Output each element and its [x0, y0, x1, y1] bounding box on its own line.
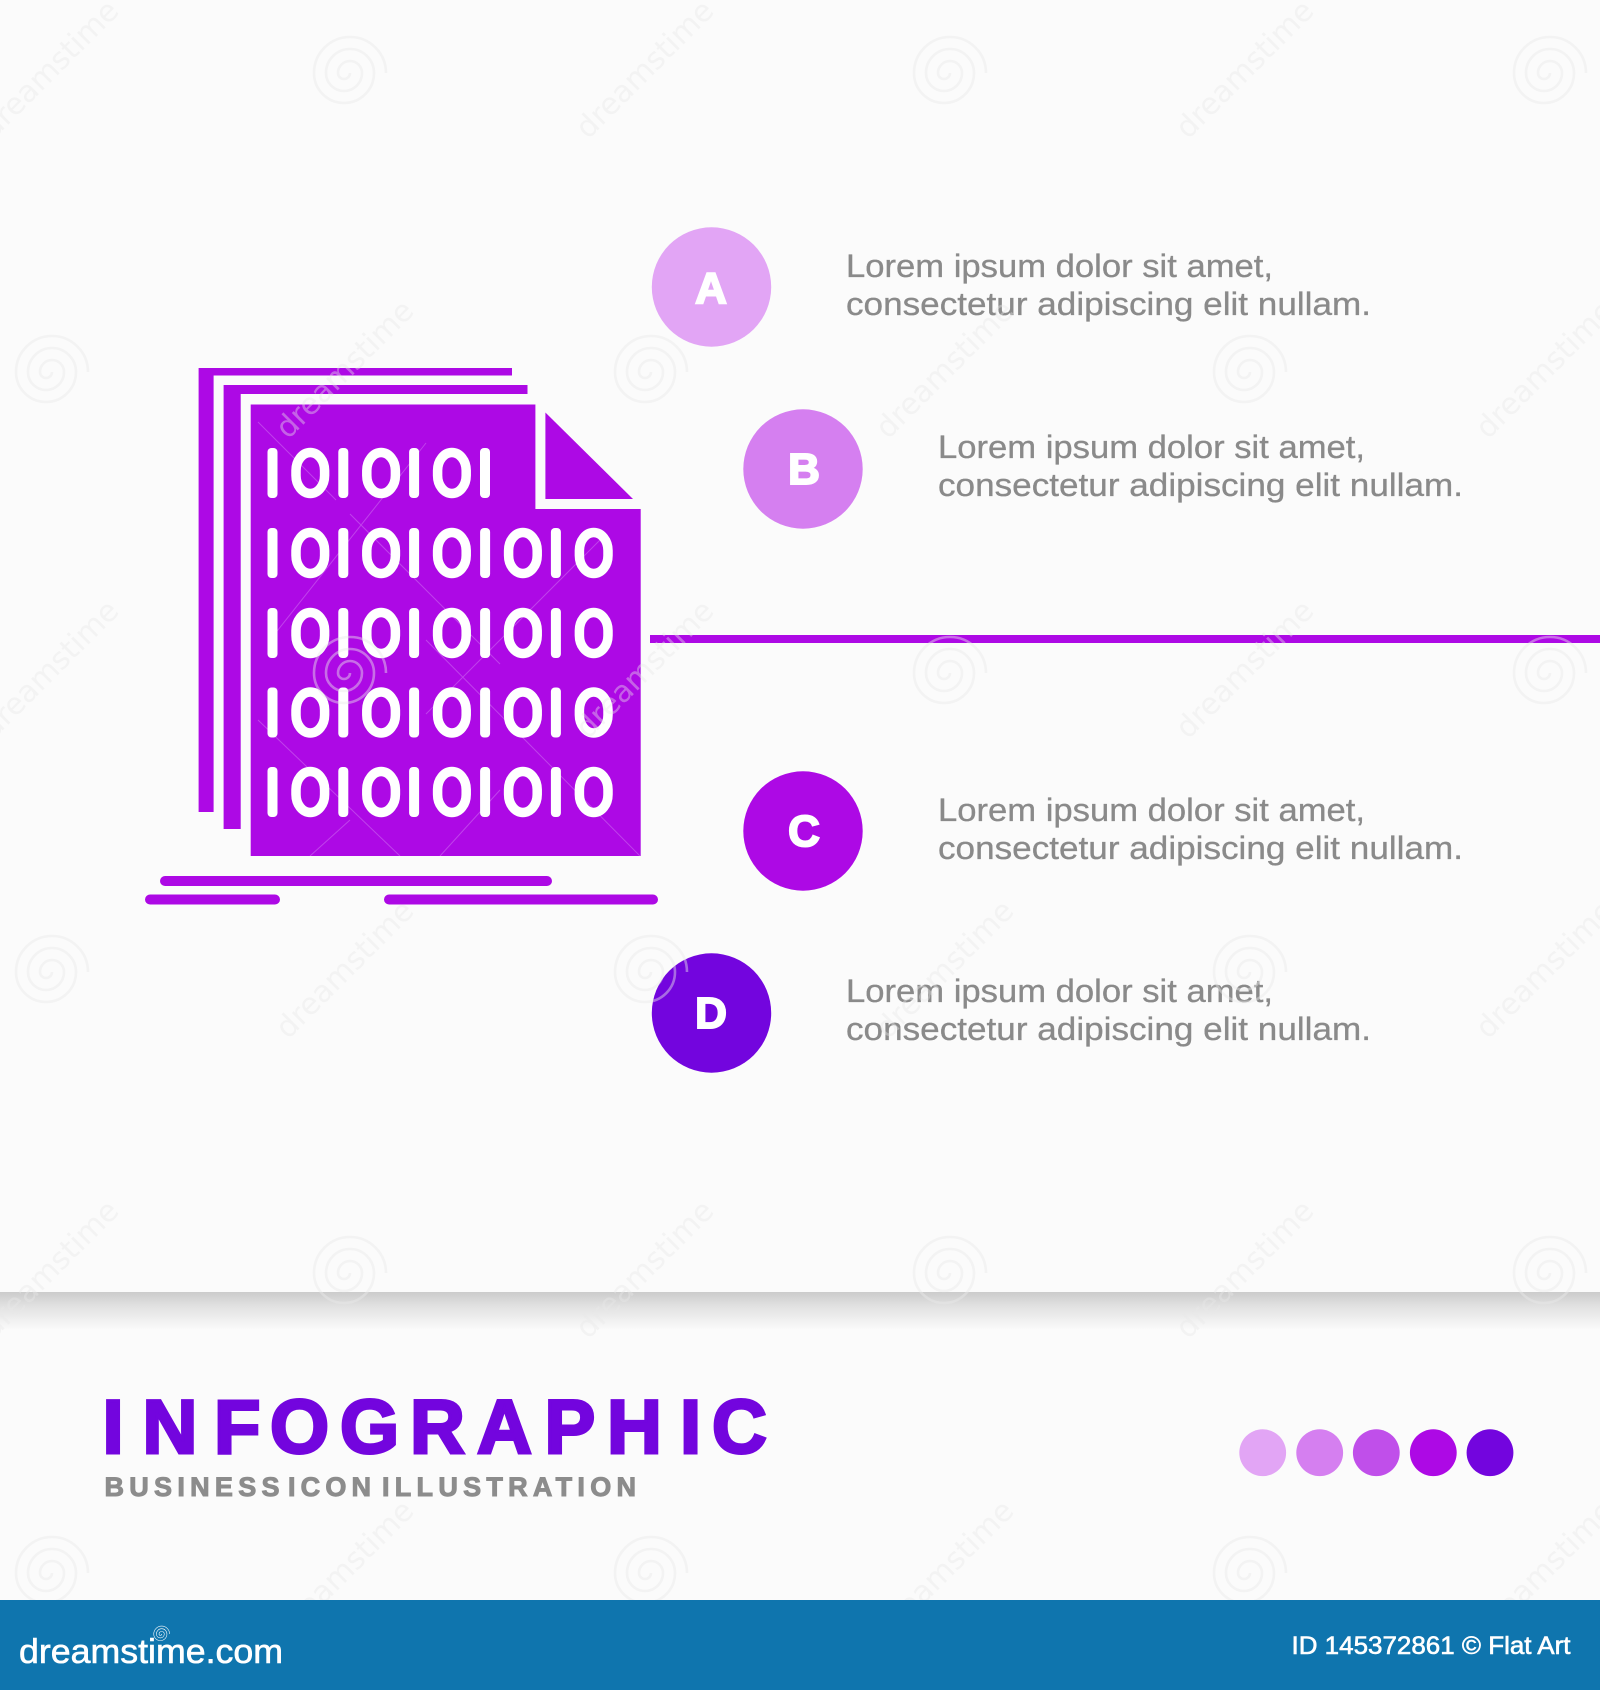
text B	[938, 429, 1463, 503]
text B: Lorem ipsum dolor sit amet,	[938, 429, 1365, 465]
watermark text: dreamstime	[869, 1493, 1021, 1646]
watermark text: dreamstime	[269, 893, 421, 1046]
watermark text: dreamstime	[1169, 1193, 1321, 1346]
step D	[652, 953, 1371, 1073]
title: INFOGRAPHIC	[102, 1385, 767, 1470]
circle A: A	[695, 264, 727, 313]
text A: Lorem ipsum dolor sit amet,	[846, 248, 1273, 284]
text D: Lorem ipsum dolor sit amet,	[846, 973, 1273, 1009]
main document page	[251, 404, 641, 856]
circle B: B	[788, 445, 820, 494]
circle B	[743, 409, 863, 529]
circle C: C	[788, 807, 820, 856]
icon: binary code document stack	[145, 368, 658, 904]
divider shadow band	[0, 1292, 1600, 1330]
subtitle: BUSINESS	[104, 1472, 280, 1502]
text C: consectetur adipiscing elit nullam.	[938, 830, 1463, 866]
text B: consectetur adipiscing elit nullam.	[938, 467, 1463, 503]
folded corner	[545, 412, 633, 499]
middle sheet	[224, 385, 528, 829]
watermark text: dreamstime	[269, 293, 421, 446]
image id credit: ID 145372861 © Flat Art	[1292, 1632, 1571, 1660]
watermark text: dreamstime	[1169, 593, 1321, 746]
watermark text: dreamstime	[869, 893, 1021, 1046]
text C	[938, 792, 1463, 866]
footer bar	[0, 1600, 1600, 1690]
step B	[743, 409, 1463, 529]
subtitle	[104, 1472, 636, 1502]
text D	[846, 973, 1371, 1047]
text A	[846, 248, 1371, 322]
circle D: D	[695, 989, 727, 1038]
subtitle: ICON	[288, 1472, 371, 1502]
icon: brand spiral	[154, 1626, 170, 1641]
text D: consectetur adipiscing elit nullam.	[846, 1011, 1371, 1047]
step A	[652, 227, 1371, 347]
horizontal connector line	[650, 635, 1600, 643]
watermark text: dreamstime	[569, 593, 721, 746]
circle A	[652, 227, 771, 347]
circle C	[743, 771, 863, 891]
circle D	[652, 953, 771, 1073]
binary digits	[268, 448, 608, 817]
ground lines	[145, 876, 658, 904]
footer brand: dreamstime.com	[19, 1633, 283, 1671]
watermark text: dreamstime	[869, 293, 1021, 446]
text A: consectetur adipiscing elit nullam.	[846, 286, 1371, 322]
subtitle: ILLUSTRATION	[382, 1472, 636, 1502]
watermark text: dreamstime	[269, 1493, 421, 1646]
back sheet	[199, 368, 512, 812]
colour dots	[1239, 1429, 1513, 1476]
step C	[743, 771, 1463, 891]
text C: Lorem ipsum dolor sit amet,	[938, 792, 1365, 828]
watermark text: dreamstime	[569, 1193, 721, 1346]
